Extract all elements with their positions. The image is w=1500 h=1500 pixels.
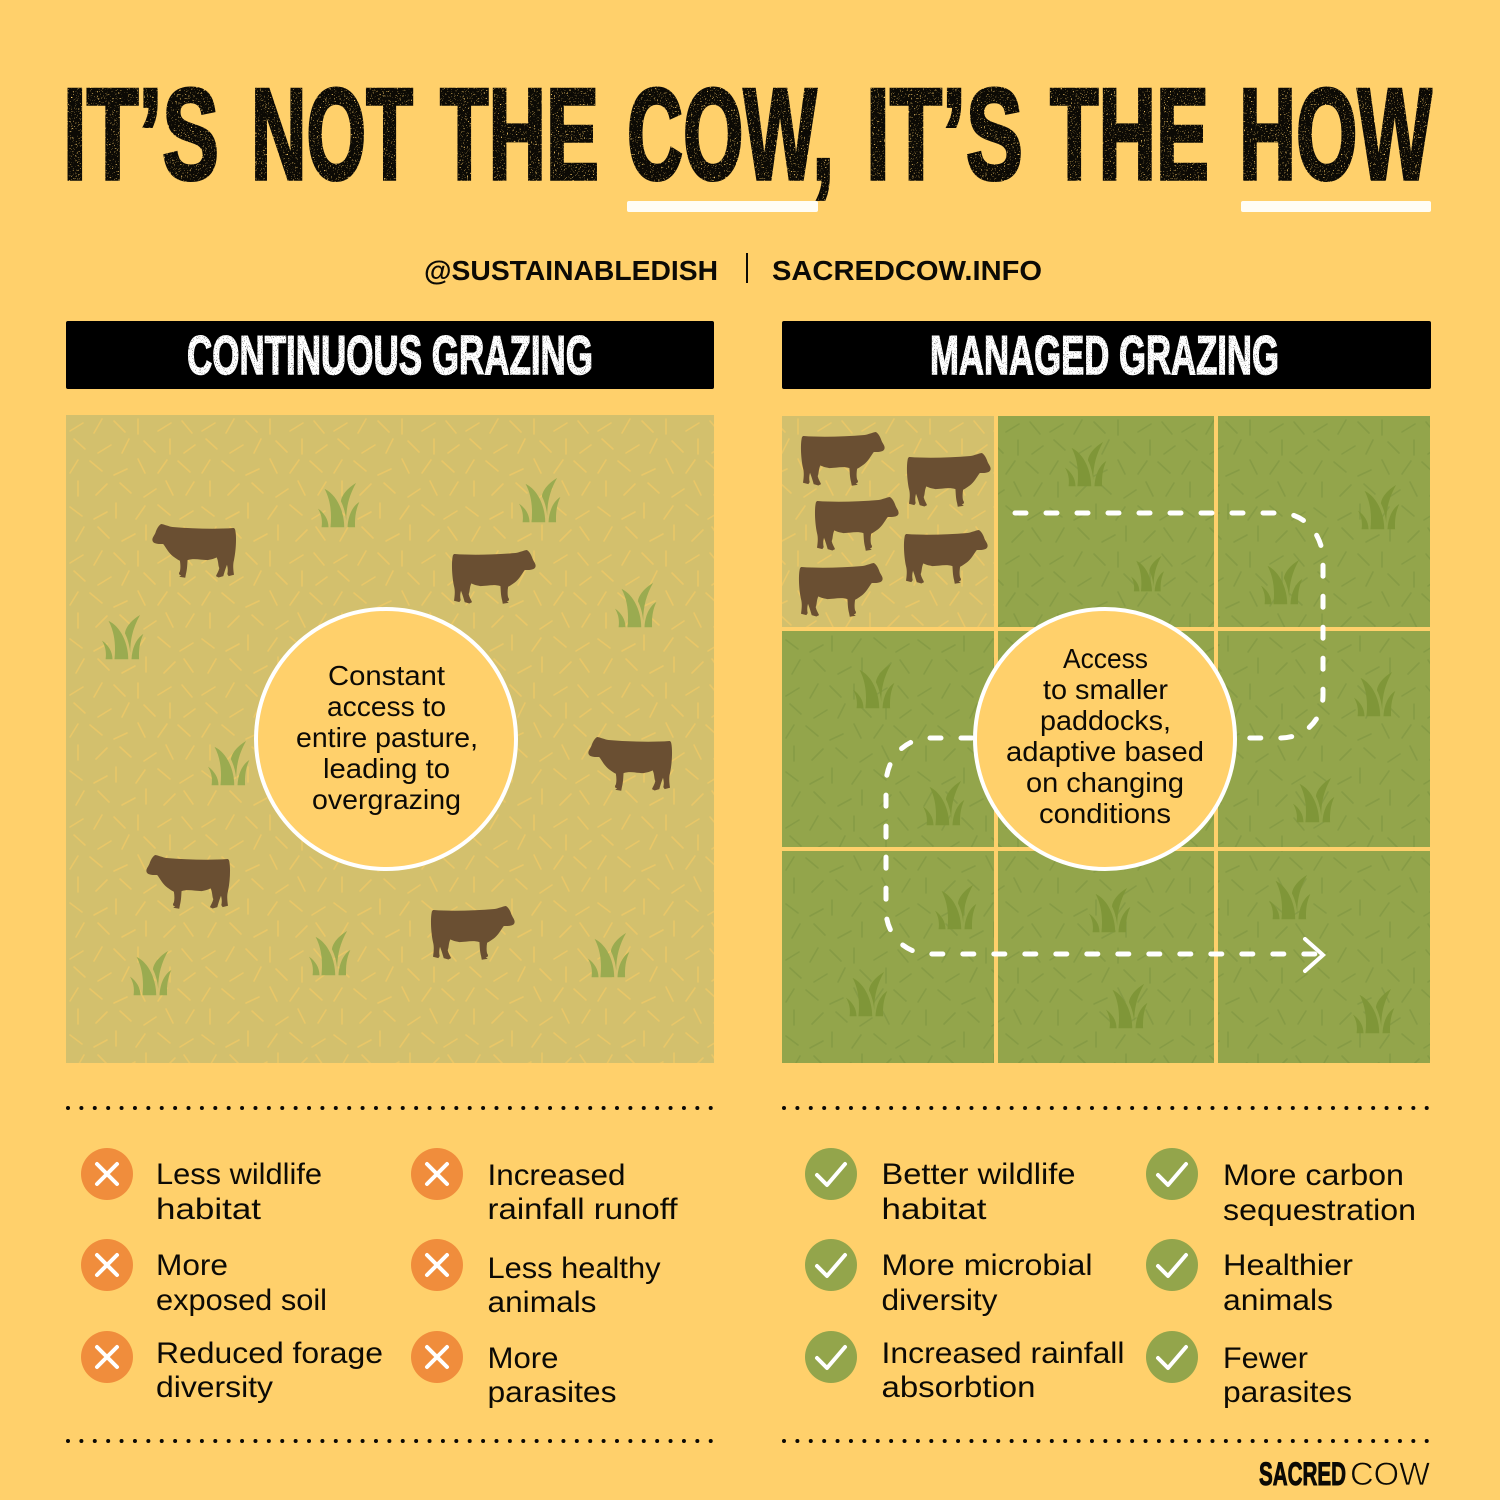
pasture illustration: overgrazed xyxy=(66,415,714,1063)
title: IT’S xyxy=(63,61,219,207)
benefits text: diversity xyxy=(882,1284,998,1317)
heading: continuous grazing xyxy=(66,321,714,389)
list: managed grazing benefits xyxy=(805,1148,1416,1409)
arrow: rotation path xyxy=(886,513,1323,971)
drawbacks text: Increased xyxy=(488,1159,626,1192)
callout: constant access: leading to xyxy=(323,753,450,784)
credits line: SACREDCOW.INFO xyxy=(772,255,1042,286)
benefits text: absorbtion xyxy=(882,1371,1036,1404)
callout: smaller paddocks: paddocks, xyxy=(1040,705,1171,736)
callout: smaller paddocks xyxy=(975,609,1235,869)
benefits text: More microbial xyxy=(882,1249,1092,1282)
underline: how xyxy=(1241,201,1431,212)
title: THE xyxy=(1050,61,1209,207)
icon: check marks xyxy=(805,1148,1198,1383)
credits line: @SUSTAINABLEDISH xyxy=(424,255,718,286)
drawbacks text xyxy=(156,1158,678,1409)
drawbacks text: exposed soil xyxy=(156,1284,327,1317)
benefits text: Increased rainfall xyxy=(882,1337,1124,1370)
drawbacks text: More xyxy=(488,1342,558,1375)
callout: constant access: overgrazing xyxy=(312,784,461,815)
callout: constant access xyxy=(256,609,516,869)
underline: cow xyxy=(627,201,818,212)
benefits text: sequestration xyxy=(1223,1194,1416,1227)
benefits text: parasites xyxy=(1223,1376,1352,1409)
title xyxy=(63,61,1432,207)
title: IT’S xyxy=(866,61,1023,207)
credits line xyxy=(424,253,1042,286)
title: COW, xyxy=(627,61,834,207)
logo: sacred cow: COW xyxy=(1350,1456,1431,1492)
list: continuous grazing drawbacks xyxy=(81,1148,678,1409)
callout: smaller paddocks: on changing xyxy=(1026,767,1184,798)
drawbacks text: rainfall runoff xyxy=(488,1193,678,1226)
heading: managed grazing xyxy=(782,321,1431,389)
title: NOT xyxy=(251,61,413,207)
title: THE xyxy=(440,61,599,207)
drawbacks text: parasites xyxy=(488,1376,616,1409)
heading: continuous grazing: CONTINUOUS GRAZING xyxy=(187,324,593,386)
callout: constant access: entire pasture, xyxy=(296,722,478,753)
drawbacks text: Less healthy xyxy=(488,1252,660,1285)
drawbacks text: habitat xyxy=(156,1193,262,1226)
callout: constant access: Constant xyxy=(328,660,445,691)
callout: smaller paddocks: adaptive based xyxy=(1006,736,1204,767)
benefits text: More carbon xyxy=(1223,1159,1404,1192)
heading: managed grazing: MANAGED GRAZING xyxy=(930,324,1279,386)
drawbacks text: diversity xyxy=(156,1371,273,1404)
callout: smaller paddocks: conditions xyxy=(1039,798,1171,829)
logo: sacred cow: SACRED xyxy=(1259,1456,1346,1492)
benefits text: animals xyxy=(1223,1284,1333,1317)
drawbacks text: Reduced forage xyxy=(156,1337,383,1370)
panel: managed grazing xyxy=(782,321,1431,1063)
callout: smaller paddocks: to smaller xyxy=(1043,674,1168,705)
panel: continuous grazing xyxy=(66,321,714,1063)
benefits text: Healthier xyxy=(1223,1249,1353,1282)
callout: constant access: access to xyxy=(327,691,446,722)
benefits text: Fewer xyxy=(1223,1342,1308,1375)
drawbacks text: animals xyxy=(488,1286,596,1319)
icon: x marks xyxy=(81,1148,463,1383)
drawbacks text: More xyxy=(156,1249,228,1282)
benefits text: habitat xyxy=(882,1193,987,1226)
paddock grid illustration xyxy=(782,416,1430,1063)
callout: smaller paddocks: Access xyxy=(1063,643,1148,674)
drawbacks text: Less wildlife xyxy=(156,1158,322,1191)
benefits text xyxy=(882,1158,1416,1409)
benefits text: Better wildlife xyxy=(882,1158,1076,1191)
